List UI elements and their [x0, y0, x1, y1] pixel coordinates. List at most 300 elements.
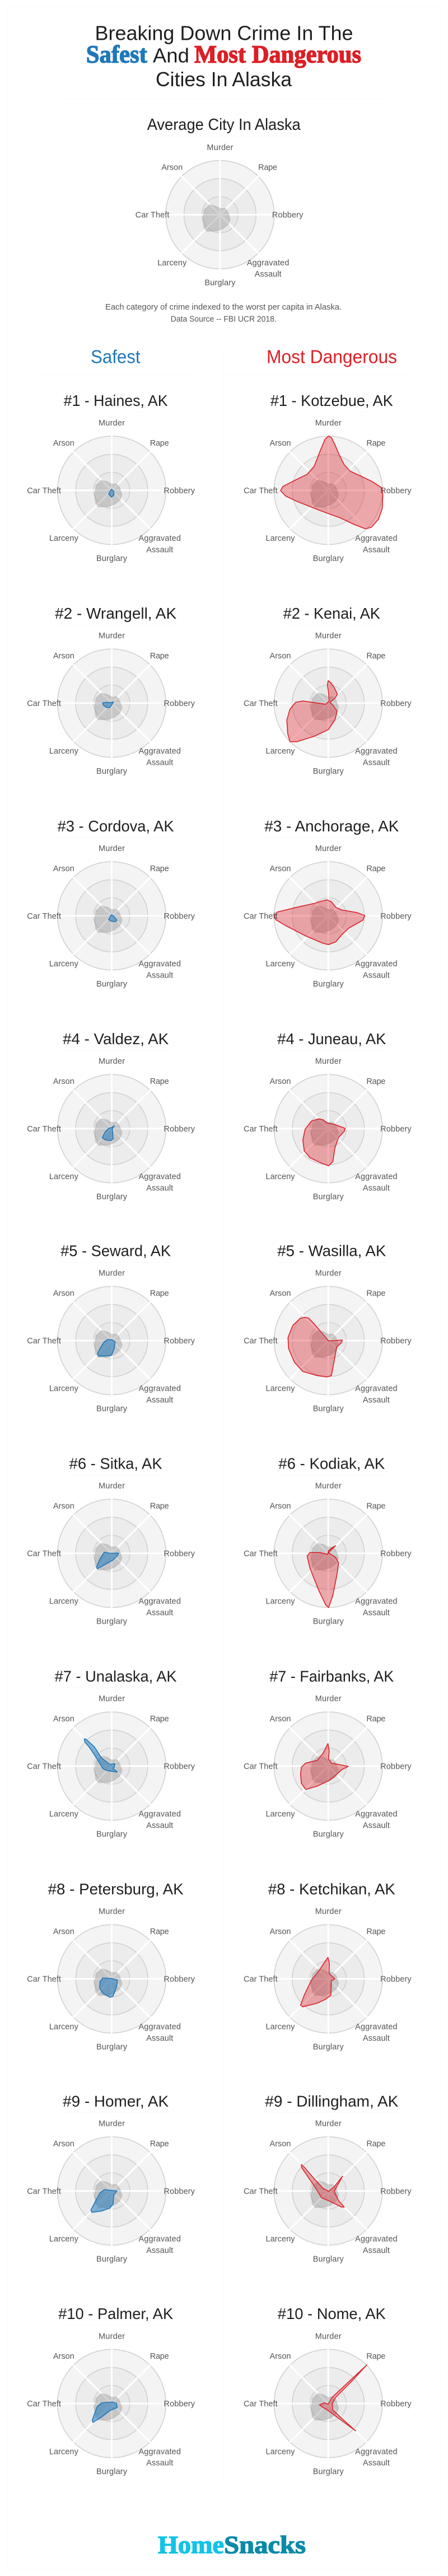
title: And	[153, 44, 189, 67]
radar grid and average shape	[56, 648, 167, 759]
axis labels: Car Theft	[244, 912, 278, 921]
axis labels: Larceny	[266, 747, 295, 756]
title: Cities In Alaska	[156, 68, 292, 91]
axis labels: Larceny	[266, 534, 295, 543]
axis labels: Murder	[99, 1269, 125, 1278]
city title: Valdez: #4 - Valdez, AK	[63, 1030, 169, 1048]
city title: Kotzebue: #1 - Kotzebue, AK	[270, 392, 393, 409]
axis labels: Murder	[315, 1908, 342, 1916]
chart: Cordova	[27, 844, 195, 989]
axis labels: Car Theft	[244, 1336, 278, 1345]
radar grid and average shape	[56, 1923, 167, 2034]
chart: Dillingham	[244, 2120, 412, 2264]
axis labels: Arson	[53, 2140, 74, 2149]
axis labels: Arson	[53, 2352, 74, 2361]
radar grid and average shape	[56, 1285, 167, 1396]
radar grid and average shape	[56, 2135, 167, 2246]
axis labels: Assault	[146, 759, 173, 768]
axis labels: Murder	[315, 1482, 342, 1491]
chart: Valdez	[27, 1057, 195, 1201]
axis labels: Burglary	[96, 980, 128, 989]
axis labels: Robbery	[164, 487, 195, 495]
axis labels: Rape	[150, 1715, 169, 1724]
axis labels: Robbery	[164, 912, 195, 921]
axis labels: Larceny	[49, 1385, 79, 1394]
axis labels: Aggravated	[355, 1810, 398, 1819]
axis labels	[244, 844, 412, 989]
axis labels: Larceny	[49, 2447, 79, 2456]
axis labels: Larceny	[49, 1172, 79, 1181]
axis labels: Arson	[270, 1928, 291, 1937]
city title: Haines: #1 - Haines, AK	[64, 392, 168, 409]
axis labels: Burglary	[313, 2043, 344, 2052]
axis labels: Larceny	[49, 2235, 79, 2244]
axis labels: Aggravated	[138, 960, 181, 969]
axis labels	[244, 2332, 412, 2476]
axis labels: Murder	[315, 1057, 342, 1066]
city shape	[319, 2365, 367, 2431]
chart: Anchorage	[244, 844, 412, 989]
city title: Nome: #10 - Nome, AK	[278, 2305, 386, 2322]
radar grid and average shape	[273, 861, 384, 971]
axis labels: Robbery	[380, 1549, 412, 1558]
axis labels: Larceny	[49, 2023, 79, 2032]
radar grid and average shape	[56, 1498, 167, 1609]
city title: Kenai: #2 - Kenai, AK	[283, 605, 380, 622]
axis labels: Murder	[207, 143, 234, 152]
axis labels: Larceny	[266, 960, 295, 969]
axis labels: Murder	[315, 844, 342, 853]
axis labels: Car Theft	[136, 211, 169, 219]
axis labels: Robbery	[164, 1125, 195, 1134]
axis labels: Rape	[150, 652, 169, 661]
axis labels: Car Theft	[27, 1549, 61, 1558]
axis labels: Burglary	[96, 767, 128, 776]
axis labels: Assault	[363, 1184, 390, 1193]
radar grid and average shape	[56, 861, 167, 971]
axis labels	[244, 1057, 412, 1201]
city shape	[303, 1119, 345, 1166]
axis labels: Rape	[366, 864, 385, 873]
title: Breaking Down Crime In The	[95, 21, 353, 45]
axis labels: Assault	[363, 759, 390, 768]
axis labels: Robbery	[380, 1762, 412, 1771]
axis labels: Aggravated	[138, 1597, 181, 1606]
axis labels: Robbery	[380, 1975, 412, 1984]
axis labels: Rape	[150, 1502, 169, 1511]
chart: Wasilla	[244, 1269, 412, 1414]
axis labels: Murder	[99, 1908, 125, 1916]
axis labels: Larceny	[49, 747, 79, 756]
title	[86, 21, 361, 91]
axis labels: Rape	[366, 1077, 385, 1086]
city shape	[288, 1317, 342, 1377]
city title: Homer: #9 - Homer, AK	[63, 2092, 169, 2110]
data source note: Each category of crime indexed to the worst per capita in Alaska.	[105, 302, 342, 312]
radar grid and average shape	[165, 159, 276, 270]
axis labels: Robbery	[164, 1975, 195, 1984]
axis labels: Rape	[150, 439, 169, 448]
axis labels: Rape	[366, 1289, 385, 1298]
axis labels: Aggravated	[138, 2235, 181, 2244]
axis labels: Arson	[270, 1715, 291, 1724]
axis labels: Aggravated	[355, 747, 398, 756]
axis labels	[244, 1269, 412, 1414]
axis labels: Murder	[315, 632, 342, 641]
city shape	[307, 1546, 339, 1607]
city shape	[109, 915, 117, 922]
axis labels: Assault	[363, 1821, 390, 1830]
axis labels: Arson	[270, 1077, 291, 1086]
axis labels: Car Theft	[27, 1336, 61, 1345]
axis labels: Robbery	[164, 1336, 195, 1345]
city shape	[281, 436, 383, 529]
axis labels: Larceny	[49, 534, 79, 543]
axis labels: Larceny	[157, 259, 187, 268]
axis labels: Murder	[315, 2332, 342, 2341]
radar grid and average shape	[273, 1710, 384, 1821]
chart: Petersburg	[27, 1908, 195, 2052]
axis labels: Aggravated	[138, 747, 181, 756]
axis labels: Car Theft	[27, 2400, 61, 2409]
axis labels: Burglary	[96, 1617, 128, 1626]
axis labels: Arson	[270, 652, 291, 661]
axis labels: Murder	[99, 1695, 125, 1704]
axis labels: Assault	[363, 1396, 390, 1405]
axis labels	[244, 1908, 412, 2052]
axis labels: Burglary	[313, 1830, 344, 1839]
axis labels: Arson	[53, 1077, 74, 1086]
chart: Unalaska	[27, 1695, 195, 1839]
axis labels: Murder	[315, 1269, 342, 1278]
axis labels: Car Theft	[244, 1125, 278, 1134]
radar grid and average shape	[56, 1073, 167, 1184]
column heading: safest: Safest	[91, 347, 141, 367]
axis labels: Aggravated	[355, 1172, 398, 1181]
axis labels: Robbery	[164, 1762, 195, 1771]
axis labels: Arson	[270, 2352, 291, 2361]
axis labels: Burglary	[96, 2255, 128, 2264]
axis labels: Murder	[99, 419, 125, 428]
axis labels: Aggravated	[138, 2023, 181, 2032]
axis labels: Robbery	[164, 699, 195, 708]
axis labels: Car Theft	[244, 1549, 278, 1558]
axis labels: Aggravated	[355, 2235, 398, 2244]
radar grid and average shape	[273, 2135, 384, 2246]
city shape	[274, 900, 365, 945]
city title: Ketchikan: #8 - Ketchikan, AK	[268, 1881, 395, 1898]
axis labels: Burglary	[204, 279, 236, 288]
axis labels: Burglary	[313, 554, 344, 563]
axis labels: Assault	[146, 1184, 173, 1193]
radar grid and average shape	[273, 1498, 384, 1609]
axis labels: Burglary	[313, 2255, 344, 2264]
city title: Anchorage: #3 - Anchorage, AK	[264, 817, 399, 835]
city title: Cordova: #3 - Cordova, AK	[58, 817, 174, 835]
axis labels: Arson	[53, 1289, 74, 1298]
axis labels: Assault	[146, 1609, 173, 1617]
axis labels: Robbery	[380, 1336, 412, 1345]
radar grid and average shape	[273, 435, 384, 546]
axis labels	[27, 844, 195, 989]
radar grid and average shape	[56, 2348, 167, 2459]
axis labels: Assault	[363, 545, 390, 554]
axis labels: Car Theft	[27, 2187, 61, 2196]
axis labels: Rape	[366, 652, 385, 661]
axis labels: Car Theft	[244, 1762, 278, 1771]
title: Safest	[86, 40, 147, 68]
data source note: Data Source -- FBI UCR 2018.	[171, 315, 277, 324]
axis labels	[27, 419, 195, 563]
axis labels: Burglary	[313, 767, 344, 776]
axis labels: Larceny	[266, 2023, 295, 2032]
axis labels: Murder	[315, 419, 342, 428]
axis labels: Car Theft	[27, 1975, 61, 1984]
logo: HomeSnacks	[158, 2531, 306, 2559]
axis labels: Rape	[150, 1289, 169, 1298]
axis labels: Rape	[150, 2140, 169, 2149]
axis labels: Assault	[146, 2034, 173, 2043]
axis labels: Robbery	[380, 2187, 412, 2196]
axis labels: Arson	[53, 1715, 74, 1724]
axis labels: Aggravated	[138, 2447, 181, 2456]
axis labels: Arson	[53, 652, 74, 661]
city shape	[102, 702, 114, 708]
axis labels	[244, 419, 412, 563]
axis labels	[27, 2332, 195, 2476]
column heading: most dangerous: Most Dangerous	[267, 347, 397, 367]
axis labels: Burglary	[313, 1405, 344, 1414]
axis labels: Arson	[270, 1502, 291, 1511]
axis labels: Assault	[146, 545, 173, 554]
chart: Juneau	[244, 1057, 412, 1201]
axis labels: Assault	[146, 1821, 173, 1830]
axis labels: Car Theft	[27, 487, 61, 495]
axis labels	[27, 1269, 195, 1414]
radar grid and average shape	[56, 435, 167, 546]
city shape	[301, 2164, 344, 2207]
axis labels: Assault	[255, 270, 282, 279]
axis labels: Burglary	[313, 980, 344, 989]
city shape	[91, 2190, 117, 2213]
axis labels: Arson	[270, 864, 291, 873]
axis labels: Assault	[363, 2246, 390, 2255]
city shape	[92, 2402, 117, 2423]
chart: Kenai	[244, 632, 412, 776]
axis labels: Larceny	[266, 1597, 295, 1606]
axis labels: Car Theft	[27, 912, 61, 921]
axis labels: Robbery	[380, 2400, 412, 2409]
axis labels: Assault	[363, 1609, 390, 1617]
axis labels	[27, 2120, 195, 2264]
axis labels: Rape	[366, 2140, 385, 2149]
axis labels: Larceny	[266, 1172, 295, 1181]
axis labels: Burglary	[96, 1405, 128, 1414]
axis labels	[27, 1908, 195, 2052]
chart: Kotzebue	[244, 419, 412, 563]
axis labels: Rape	[366, 2352, 385, 2361]
axis labels: Larceny	[266, 2235, 295, 2244]
axis labels: Assault	[146, 1396, 173, 1405]
city title: Seward: #5 - Seward, AK	[60, 1242, 171, 1260]
axis labels: Arson	[161, 163, 183, 172]
axis labels: Larceny	[266, 1810, 295, 1819]
logo: HomeSnacks: Home	[158, 2531, 224, 2559]
axis labels: Car Theft	[27, 1762, 61, 1771]
chart: Nome	[244, 2332, 412, 2476]
axis labels: Aggravated	[355, 1597, 398, 1606]
axis labels	[244, 632, 412, 776]
axis labels: Murder	[99, 2120, 125, 2129]
city title: Wasilla: #5 - Wasilla, AK	[277, 1242, 386, 1260]
axis labels: Car Theft	[244, 487, 278, 495]
axis labels: Aggravated	[138, 1810, 181, 1819]
axis labels: Arson	[53, 439, 74, 448]
city title: Palmer: #10 - Palmer, AK	[58, 2305, 173, 2322]
radar grid and average shape	[273, 1073, 384, 1184]
axis labels: Robbery	[380, 699, 412, 708]
axis labels: Robbery	[380, 487, 412, 495]
axis labels	[27, 1057, 195, 1201]
chart: Ketchikan	[244, 1908, 412, 2052]
city shape	[301, 1957, 335, 2007]
axis labels: Robbery	[164, 2187, 195, 2196]
city title: Sitka: #6 - Sitka, AK	[69, 1455, 162, 1472]
axis labels: Rape	[366, 1715, 385, 1724]
axis labels: Burglary	[96, 2467, 128, 2476]
axis labels: Rape	[258, 163, 277, 172]
city shape	[100, 1978, 118, 1997]
chart: Sitka	[27, 1482, 195, 1626]
axis labels: Aggravated	[138, 534, 181, 543]
radar grid and average shape	[273, 1923, 384, 2034]
axis labels: Larceny	[49, 960, 79, 969]
city title: Petersburg: #8 - Petersburg, AK	[48, 1881, 184, 1898]
radar grid and average shape	[56, 1710, 167, 1821]
city shape	[301, 1743, 348, 1789]
axis labels: Arson	[270, 2140, 291, 2149]
city title: Juneau: #4 - Juneau, AK	[277, 1030, 386, 1048]
city title: Kodiak: #6 - Kodiak, AK	[278, 1455, 385, 1472]
axis labels: Burglary	[313, 1193, 344, 1201]
axis labels: Car Theft	[244, 2400, 278, 2409]
axis labels: Murder	[315, 2120, 342, 2129]
axis labels: Rape	[366, 1502, 385, 1511]
chart: Seward	[27, 1269, 195, 1414]
axis labels: Murder	[315, 1695, 342, 1704]
axis labels: Robbery	[164, 1549, 195, 1558]
axis labels: Burglary	[313, 2467, 344, 2476]
axis labels: Arson	[270, 439, 291, 448]
title: Most Dangerous	[194, 40, 361, 68]
data source note	[105, 302, 342, 324]
axis labels	[244, 1695, 412, 1839]
axis labels: Assault	[363, 971, 390, 980]
axis labels: Aggravated	[355, 534, 398, 543]
axis labels: Rape	[150, 2352, 169, 2361]
city shape	[96, 1552, 119, 1569]
chart: Palmer	[27, 2332, 195, 2476]
axis labels: Aggravated	[355, 960, 398, 969]
axis labels: Aggravated	[355, 2447, 398, 2456]
axis labels	[136, 143, 304, 288]
axis labels	[244, 1482, 412, 1626]
axis labels: Car Theft	[244, 1975, 278, 1984]
city title: Dillingham: #9 - Dillingham, AK	[265, 2092, 399, 2110]
city title: Fairbanks: #7 - Fairbanks, AK	[269, 1668, 394, 1685]
axis labels: Assault	[363, 2034, 390, 2043]
axis labels: Robbery	[164, 2400, 195, 2409]
axis labels	[27, 1695, 195, 1839]
axis labels: Aggravated	[355, 1385, 398, 1394]
axis labels: Rape	[150, 1077, 169, 1086]
city shape	[109, 489, 114, 497]
axis labels: Larceny	[49, 1810, 79, 1819]
chart: Homer	[27, 2120, 195, 2264]
axis labels: Aggravated	[247, 259, 289, 268]
axis labels: Aggravated	[138, 1385, 181, 1394]
axis labels: Car Theft	[244, 2187, 278, 2196]
radar grid and average shape	[273, 1285, 384, 1396]
axis labels: Assault	[146, 2459, 173, 2468]
axis labels: Rape	[150, 1928, 169, 1937]
city shape	[287, 681, 338, 742]
axis labels: Rape	[150, 864, 169, 873]
chart: Kodiak	[244, 1482, 412, 1626]
axis labels: Murder	[99, 1482, 125, 1491]
axis labels: Burglary	[96, 1830, 128, 1839]
city title: Wrangell: #2 - Wrangell, AK	[55, 605, 176, 622]
axis labels: Robbery	[380, 1125, 412, 1134]
axis labels: Arson	[53, 864, 74, 873]
axis labels: Larceny	[266, 1385, 295, 1394]
heading: average city: Average City In Alaska	[147, 116, 301, 134]
axis labels: Robbery	[272, 211, 304, 219]
chart: Fairbanks	[244, 1695, 412, 1839]
axis labels	[27, 632, 195, 776]
city shape	[85, 1738, 118, 1772]
axis labels: Rape	[366, 1928, 385, 1937]
axis labels: Arson	[53, 1502, 74, 1511]
city title: Unalaska: #7 - Unalaska, AK	[55, 1668, 177, 1685]
axis labels: Assault	[146, 971, 173, 980]
chart: Wrangell	[27, 632, 195, 776]
chart: average city	[136, 143, 304, 288]
axis labels: Car Theft	[27, 1125, 61, 1134]
radar grid and average shape	[273, 648, 384, 759]
city shape	[102, 1126, 115, 1140]
chart: Haines	[27, 419, 195, 563]
axis labels: Arson	[270, 1289, 291, 1298]
axis labels: Burglary	[96, 554, 128, 563]
city shape	[97, 1339, 115, 1356]
axis labels: Rape	[366, 439, 385, 448]
axis labels: Assault	[363, 2459, 390, 2468]
axis labels: Burglary	[96, 1193, 128, 1201]
logo: HomeSnacks: Snacks	[224, 2531, 306, 2559]
axis labels: Larceny	[49, 1597, 79, 1606]
axis labels: Assault	[146, 2246, 173, 2255]
axis labels: Murder	[99, 1057, 125, 1066]
axis labels: Murder	[99, 632, 125, 641]
axis labels: Car Theft	[244, 699, 278, 708]
axis labels	[244, 2120, 412, 2264]
axis labels: Burglary	[96, 2043, 128, 2052]
axis labels	[27, 1482, 195, 1626]
radar grid and average shape	[273, 2348, 384, 2459]
axis labels: Murder	[99, 844, 125, 853]
axis labels: Car Theft	[27, 699, 61, 708]
